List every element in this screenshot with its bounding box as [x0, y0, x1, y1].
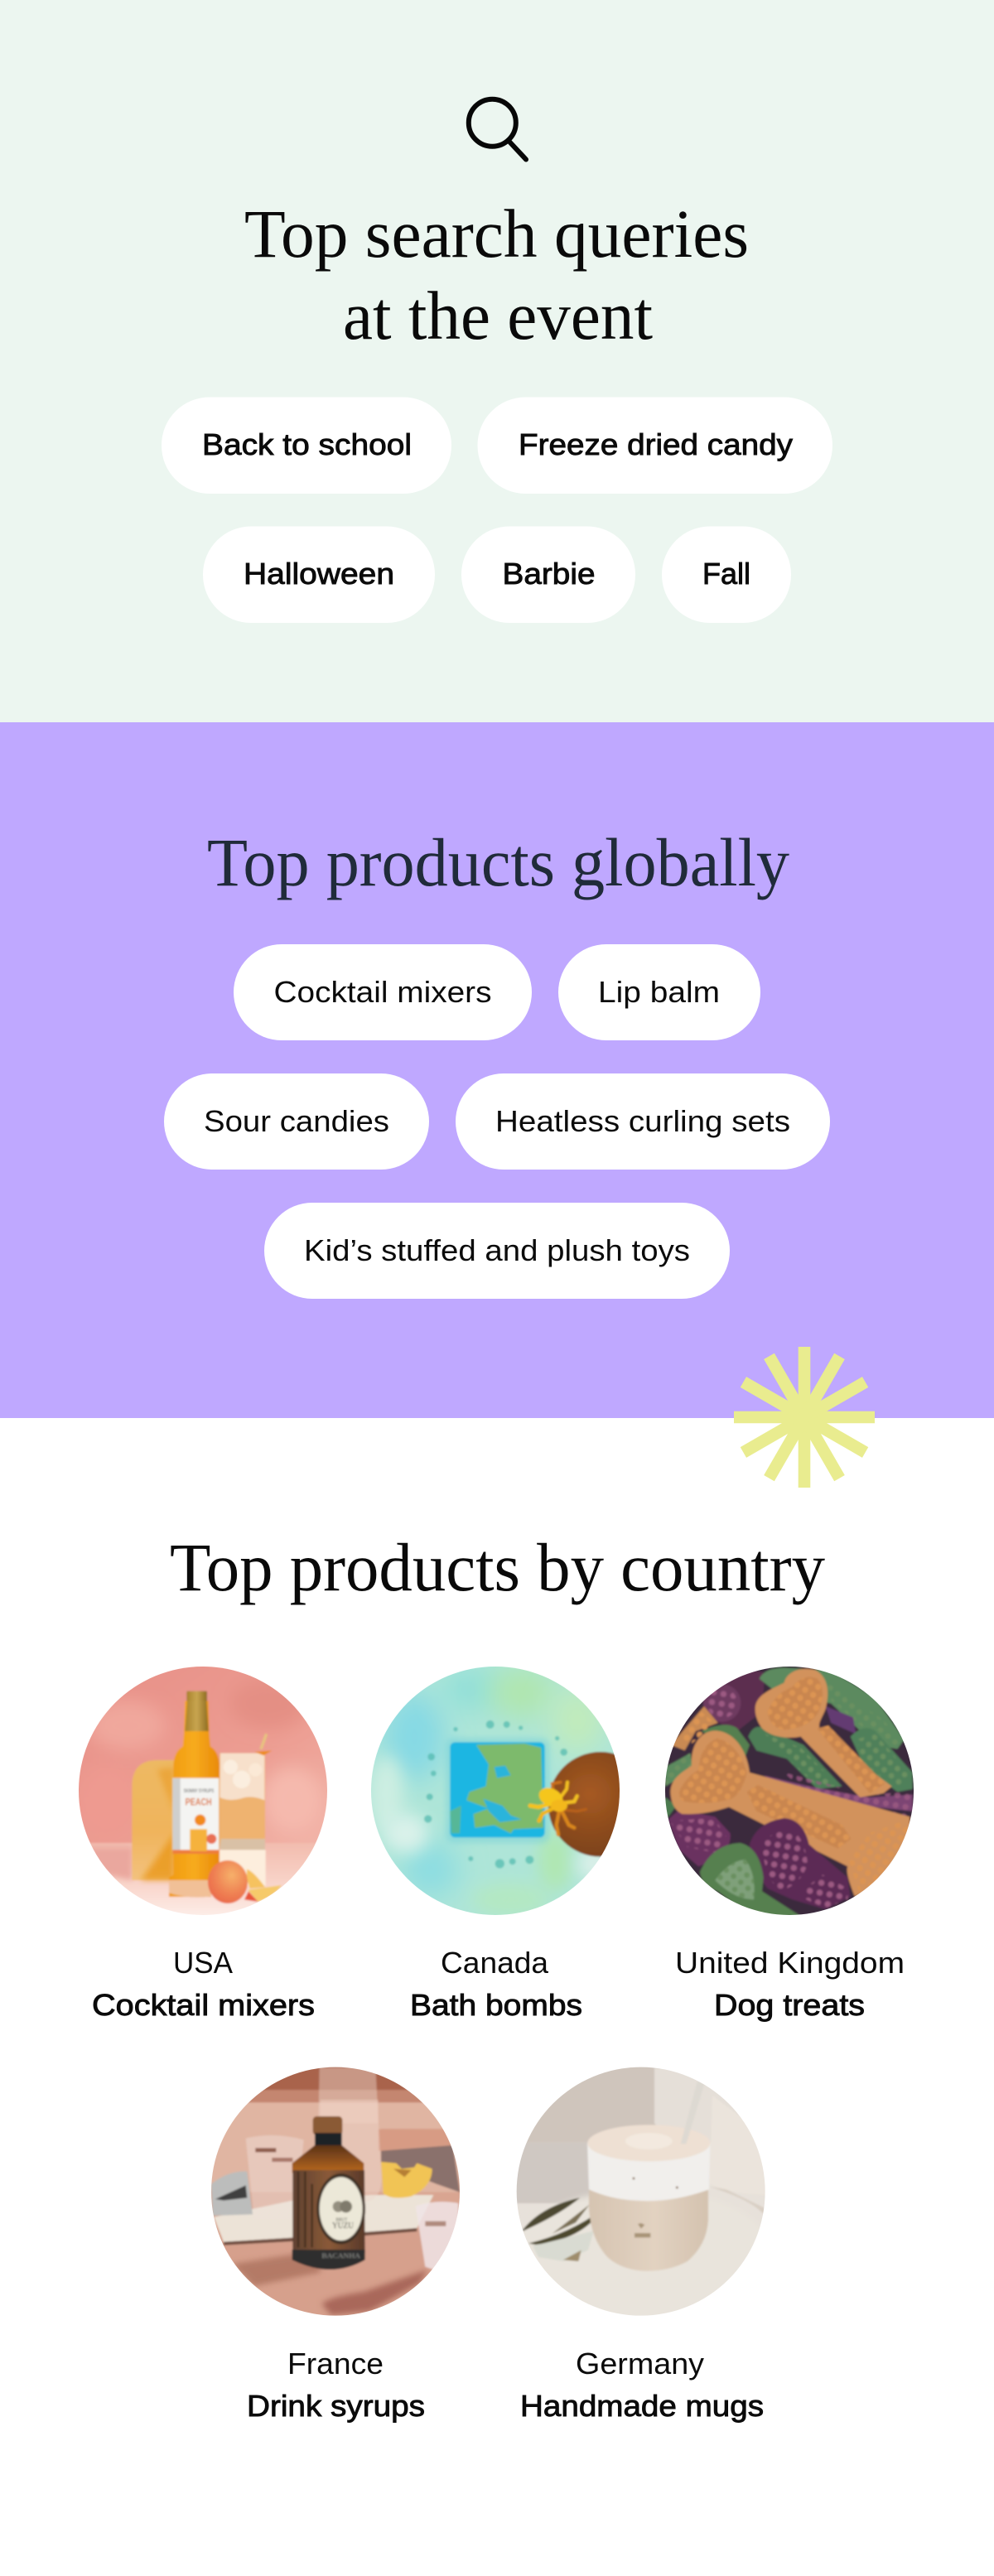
caption: canada bath bombs — [410, 1946, 582, 2022]
caption: usa cocktail mixers — [92, 1946, 315, 2022]
pill: freeze dried candy: Freeze dried candy — [519, 427, 793, 461]
pill: barbie — [461, 527, 635, 623]
photo: peach cocktail mixer bottle: PEACH — [186, 1796, 212, 1807]
photo: handmade mug — [514, 2062, 773, 2322]
pill: sour candies: Sour candies — [204, 1104, 389, 1138]
pill: back to school — [162, 398, 451, 494]
pill: fall — [662, 527, 791, 623]
heading: top products by country: Top products by country — [170, 1529, 825, 1605]
pill: kid's stuffed and plush toys — [264, 1203, 730, 1299]
panel: top search queries — [0, 0, 994, 722]
photo: yuzu syrup bottle: BRUT — [335, 2217, 347, 2222]
pill: fall: Fall — [702, 557, 750, 591]
caption: france drink syrups: Drink syrups — [247, 2389, 425, 2423]
caption: germany handmade mugs: Germany — [576, 2347, 704, 2381]
caption: germany handmade mugs — [520, 2347, 764, 2423]
caption: france drink syrups: France — [287, 2347, 384, 2381]
heading: top search queries at the event — [244, 195, 749, 354]
caption: united kingdom dog treats — [675, 1946, 905, 2022]
caption: united kingdom dog treats: Dog treats — [714, 1988, 865, 2022]
icon: magnifying glass — [469, 99, 526, 159]
pill: freeze dried candy — [477, 398, 832, 494]
photo: bath bomb — [371, 1667, 620, 1915]
photo: peach cocktail mixer bottle — [75, 1662, 331, 1918]
caption: usa cocktail mixers: Cocktail mixers — [92, 1988, 315, 2022]
caption: france drink syrups — [247, 2347, 425, 2423]
photo: yuzu syrup bottle: YUZU — [332, 2221, 354, 2231]
pill: cocktail mixers — [234, 944, 532, 1040]
pill: barbie: Barbie — [502, 557, 595, 591]
caption: germany handmade mugs: Handmade mugs — [520, 2389, 764, 2423]
pill: back to school: Back to school — [202, 427, 412, 461]
caption: canada bath bombs: Bath bombs — [410, 1988, 582, 2022]
photo: dog treats — [663, 1662, 919, 1919]
pill: lip balm — [558, 944, 760, 1040]
heading: top products globally: Top products globally — [207, 824, 789, 900]
icon: yellow starburst — [734, 1347, 875, 1488]
pill: kid's stuffed and plush toys: Kid’s stuffed and plush toys — [304, 1233, 690, 1267]
pill: sour candies — [164, 1073, 429, 1170]
panel: top products globally — [0, 722, 994, 1418]
pill: heatless curling sets — [456, 1073, 830, 1170]
photo: peach cocktail mixer bottle: SKINNY SYRUPS — [184, 1788, 215, 1794]
pill: heatless curling sets: Heatless curling sets — [495, 1104, 790, 1138]
caption: canada bath bombs: Canada — [441, 1946, 549, 1980]
pill: cocktail mixers: Cocktail mixers — [273, 975, 492, 1009]
caption: usa cocktail mixers: USA — [173, 1946, 233, 1980]
heading: top search queries at the event: Top search queries — [244, 195, 749, 272]
caption: united kingdom dog treats: United Kingdom — [675, 1946, 905, 1980]
heading: top search queries at the event: at the event — [343, 277, 653, 354]
pill: halloween — [203, 527, 435, 623]
pill: lip balm: Lip balm — [598, 975, 720, 1009]
photo: yuzu syrup bottle: BACANHA — [321, 2251, 361, 2260]
pill: halloween: Halloween — [244, 557, 394, 591]
photo: yuzu syrup bottle — [210, 2065, 464, 2319]
